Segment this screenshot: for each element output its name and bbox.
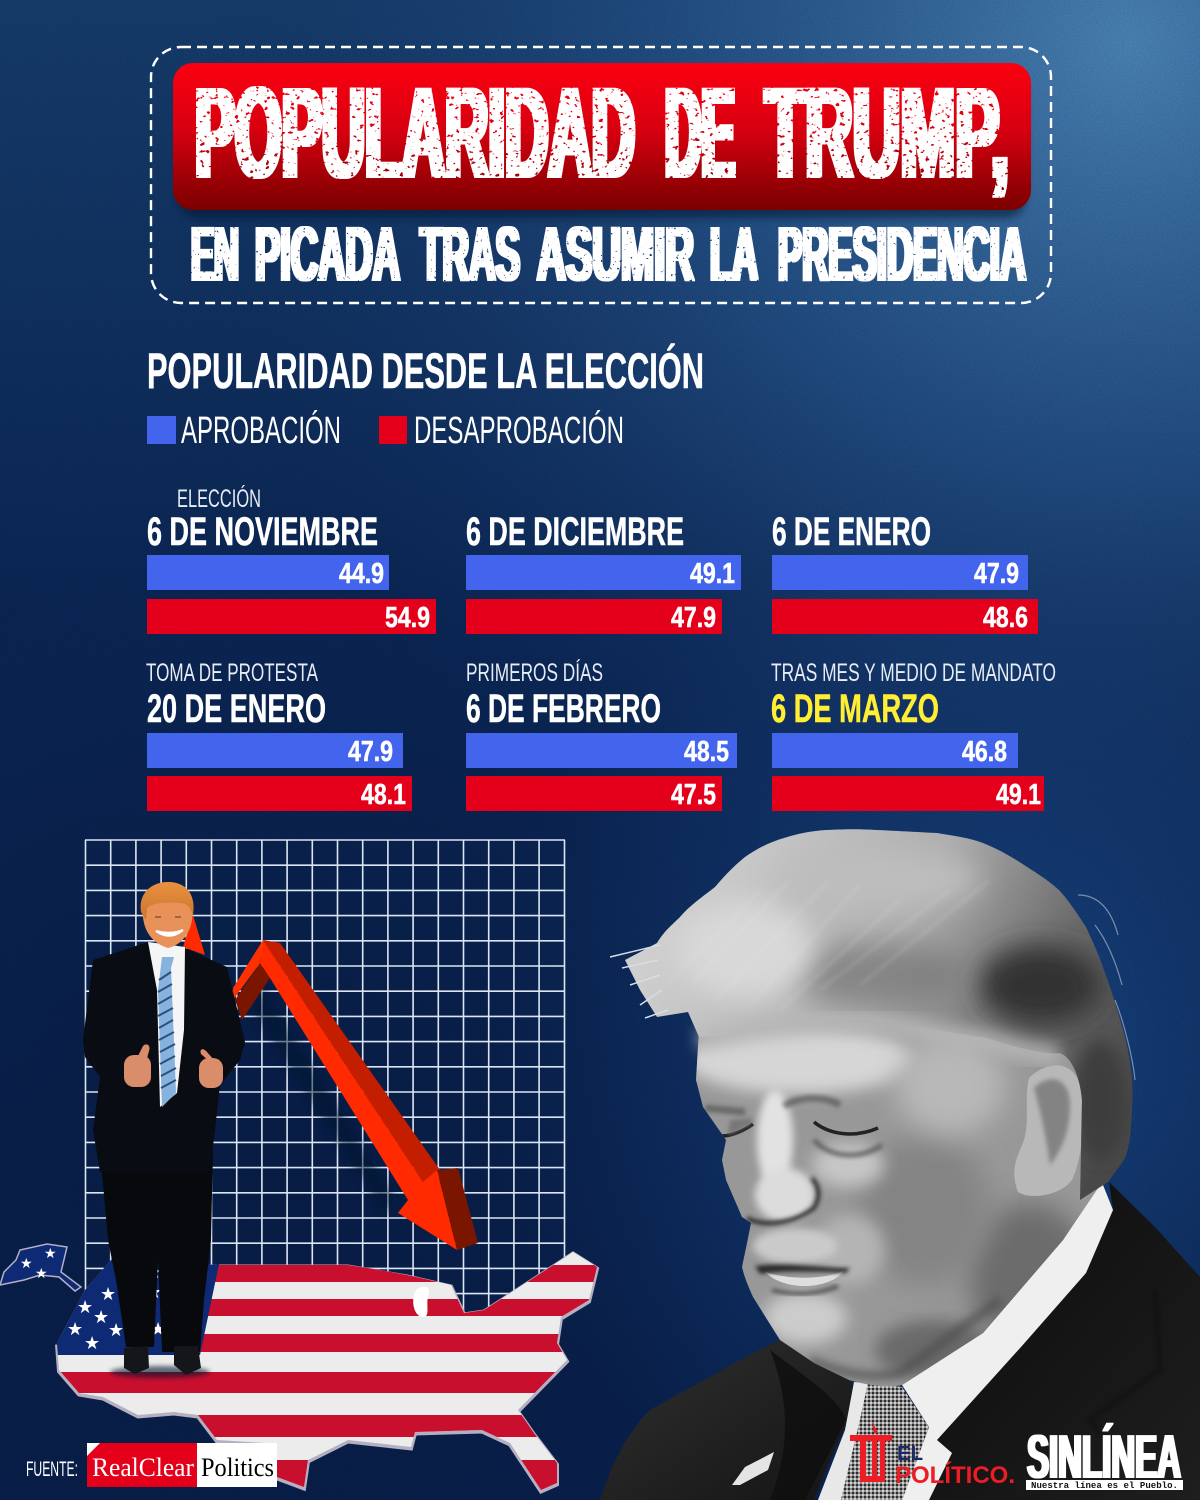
panel: 6 de febrero: 6 DE FEBRERO bbox=[466, 687, 661, 731]
map: United States flag: ★ bbox=[67, 1319, 83, 1340]
logo: RealClearPolitics: Politics bbox=[201, 1453, 274, 1482]
map: United States flag: ★ bbox=[146, 1262, 162, 1283]
map: United States flag: ★ bbox=[108, 1320, 124, 1341]
title frame: dashed border bbox=[151, 47, 1051, 303]
logo: El Político bbox=[850, 1421, 1015, 1489]
panel: 6 de enero bbox=[772, 510, 1038, 634]
source: FUENTE: bbox=[26, 1458, 78, 1481]
source bbox=[26, 1443, 277, 1487]
panel: 6 de diciembre: 47.9 bbox=[671, 602, 716, 634]
panel: 6 de marzo: 46.8 bbox=[962, 736, 1007, 768]
map: Alaska bbox=[0, 1244, 81, 1291]
legend bbox=[147, 409, 624, 452]
panel: 6 de enero: 47.9 bbox=[974, 558, 1019, 590]
panel: 20 de enero: 20 DE ENERO bbox=[147, 687, 326, 731]
panel: 6 de enero: 48.6 bbox=[983, 602, 1028, 634]
panel: 6 de marzo bbox=[771, 659, 1056, 811]
panel: 6 de febrero bbox=[466, 658, 737, 811]
grid chart backdrop bbox=[85, 840, 565, 1318]
panel: 6 de diciembre: 49.1 bbox=[690, 558, 735, 590]
map: United States flag: ★ bbox=[146, 1282, 162, 1303]
subtitle: TRAS bbox=[420, 212, 520, 298]
legend: APROBACIÓN bbox=[181, 409, 341, 452]
map: United States flag: ★ bbox=[93, 1307, 109, 1328]
panel: 20 de enero: TOMA DE PROTESTA bbox=[146, 659, 318, 687]
panel: 6 de febrero: 48.5 bbox=[684, 736, 729, 768]
map: Alaska: ★ bbox=[35, 1266, 48, 1282]
portrait: Trump looking down bbox=[600, 829, 1200, 1500]
chart heading: POPULARIDAD DESDE LA ELECCIÓN bbox=[147, 343, 704, 399]
subtitle bbox=[191, 212, 1026, 298]
panel: 6 de noviembre: 6 DE NOVIEMBRE bbox=[147, 510, 378, 554]
map: Alaska: ★ bbox=[20, 1256, 33, 1272]
subtitle: PICADA bbox=[255, 212, 400, 298]
map: United States flag: ★ bbox=[150, 1319, 166, 1340]
figure: small Trump thumbs up bbox=[83, 882, 245, 1378]
portrait: face bbox=[696, 1010, 1130, 1386]
panel: 6 de marzo: 49.1 bbox=[996, 779, 1041, 811]
icon: red monument bbox=[850, 1421, 892, 1482]
panel: 6 de noviembre bbox=[147, 484, 436, 634]
panel: 6 de noviembre: 44.9 bbox=[339, 558, 384, 590]
panel: 6 de diciembre: 6 DE DICIEMBRE bbox=[466, 510, 684, 554]
panel: 20 de enero: 48.1 bbox=[361, 779, 406, 811]
logo: RealClearPolitics bbox=[87, 1443, 277, 1487]
logo: El Político: POLÍTICO. bbox=[895, 1461, 1015, 1489]
legend: DESAPROBACIÓN bbox=[414, 409, 624, 452]
map: United States flag bbox=[0, 1240, 610, 1500]
panel: 6 de marzo: 6 DE MARZO bbox=[771, 687, 939, 731]
panel: 6 de enero: 6 DE ENERO bbox=[772, 510, 931, 554]
subtitle: ASUMIR bbox=[537, 212, 694, 298]
title text: DE bbox=[665, 62, 735, 205]
portrait: shirt and tie bbox=[818, 1180, 1113, 1500]
map: Alaska: ★ bbox=[44, 1246, 57, 1262]
panel: 6 de noviembre: ELECCIÓN bbox=[177, 484, 261, 513]
map: United States flag: ★ bbox=[77, 1297, 93, 1318]
portrait: suit bbox=[600, 1182, 1200, 1500]
panel: 20 de enero: 47.9 bbox=[348, 736, 393, 768]
panel: 6 de febrero: PRIMEROS DÍAS bbox=[466, 658, 603, 687]
map: United States flag: ★ bbox=[100, 1284, 116, 1305]
title banner bbox=[173, 62, 1031, 218]
logo: El Político: EL bbox=[897, 1443, 923, 1465]
portrait: hair bbox=[610, 829, 1135, 1200]
subtitle: LA bbox=[710, 212, 758, 298]
subtitle: EN bbox=[191, 212, 239, 298]
panel: 6 de marzo: TRAS MES Y MEDIO DE MANDATO bbox=[771, 659, 1056, 687]
panel: 6 de diciembre bbox=[466, 510, 741, 634]
logo: RealClearPolitics: RealClear bbox=[92, 1453, 194, 1482]
panel: 6 de febrero: 47.5 bbox=[671, 779, 716, 811]
map: United States flag: ★ bbox=[84, 1333, 100, 1354]
panel: 6 de noviembre: 54.9 bbox=[385, 602, 430, 634]
panel: 20 de enero bbox=[146, 659, 412, 811]
arrow: falling red trend bbox=[183, 915, 478, 1250]
title text: POPULARIDAD bbox=[195, 62, 635, 205]
portrait: ear bbox=[1014, 1065, 1083, 1196]
logo: Sin Línea: Nuestra línea es el Pueblo. bbox=[1031, 1481, 1178, 1491]
